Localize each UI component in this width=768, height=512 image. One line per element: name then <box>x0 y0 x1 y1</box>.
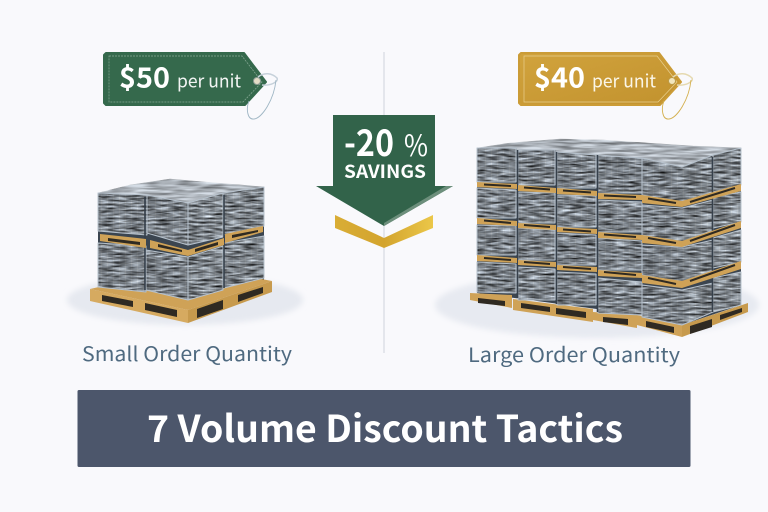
pallet base <box>90 275 272 323</box>
wooden tier pallets <box>477 182 741 288</box>
stack top wrap <box>98 179 264 203</box>
unit text: per unit <box>592 68 656 94</box>
crate gaps <box>518 150 712 312</box>
discount figure: -20 <box>344 113 394 167</box>
unit text: per unit <box>177 68 241 94</box>
small order label: Small Order Quantity <box>82 338 293 367</box>
column 2 crates <box>518 150 556 300</box>
large pallet stack <box>435 139 759 338</box>
side column crates <box>713 148 741 312</box>
gold chevron <box>335 215 433 248</box>
front corner crates <box>642 155 713 325</box>
floor shadow <box>435 272 759 338</box>
large order label: Large Order Quantity <box>468 339 681 368</box>
title: 7 Volume Discount Tactics <box>147 399 623 453</box>
column 1 crates <box>477 148 517 293</box>
top wrap <box>477 139 741 167</box>
crate edge highlights <box>477 148 741 325</box>
column 4 crates <box>598 155 642 315</box>
crate edge highlights <box>98 187 264 300</box>
price tag: $50 per unit <box>104 53 277 119</box>
upper crates <box>98 187 264 245</box>
middle pallets <box>100 226 263 256</box>
price text: $40 <box>534 56 585 96</box>
price tag: $40 per unit <box>519 53 692 119</box>
floor shadow <box>67 275 303 325</box>
crate gaps <box>145 195 224 290</box>
small pallet stack <box>67 179 303 325</box>
savings label: SAVINGS <box>344 158 426 184</box>
savings arrow <box>316 113 453 226</box>
lower crates <box>98 236 264 300</box>
pallet base <box>470 293 748 337</box>
price text: $50 <box>119 56 170 96</box>
title banner <box>78 390 690 467</box>
column 3 crates <box>557 152 597 305</box>
percent sign: % <box>404 123 428 165</box>
dark backing <box>477 148 741 325</box>
center divider <box>383 52 385 353</box>
dark backing <box>98 187 264 302</box>
